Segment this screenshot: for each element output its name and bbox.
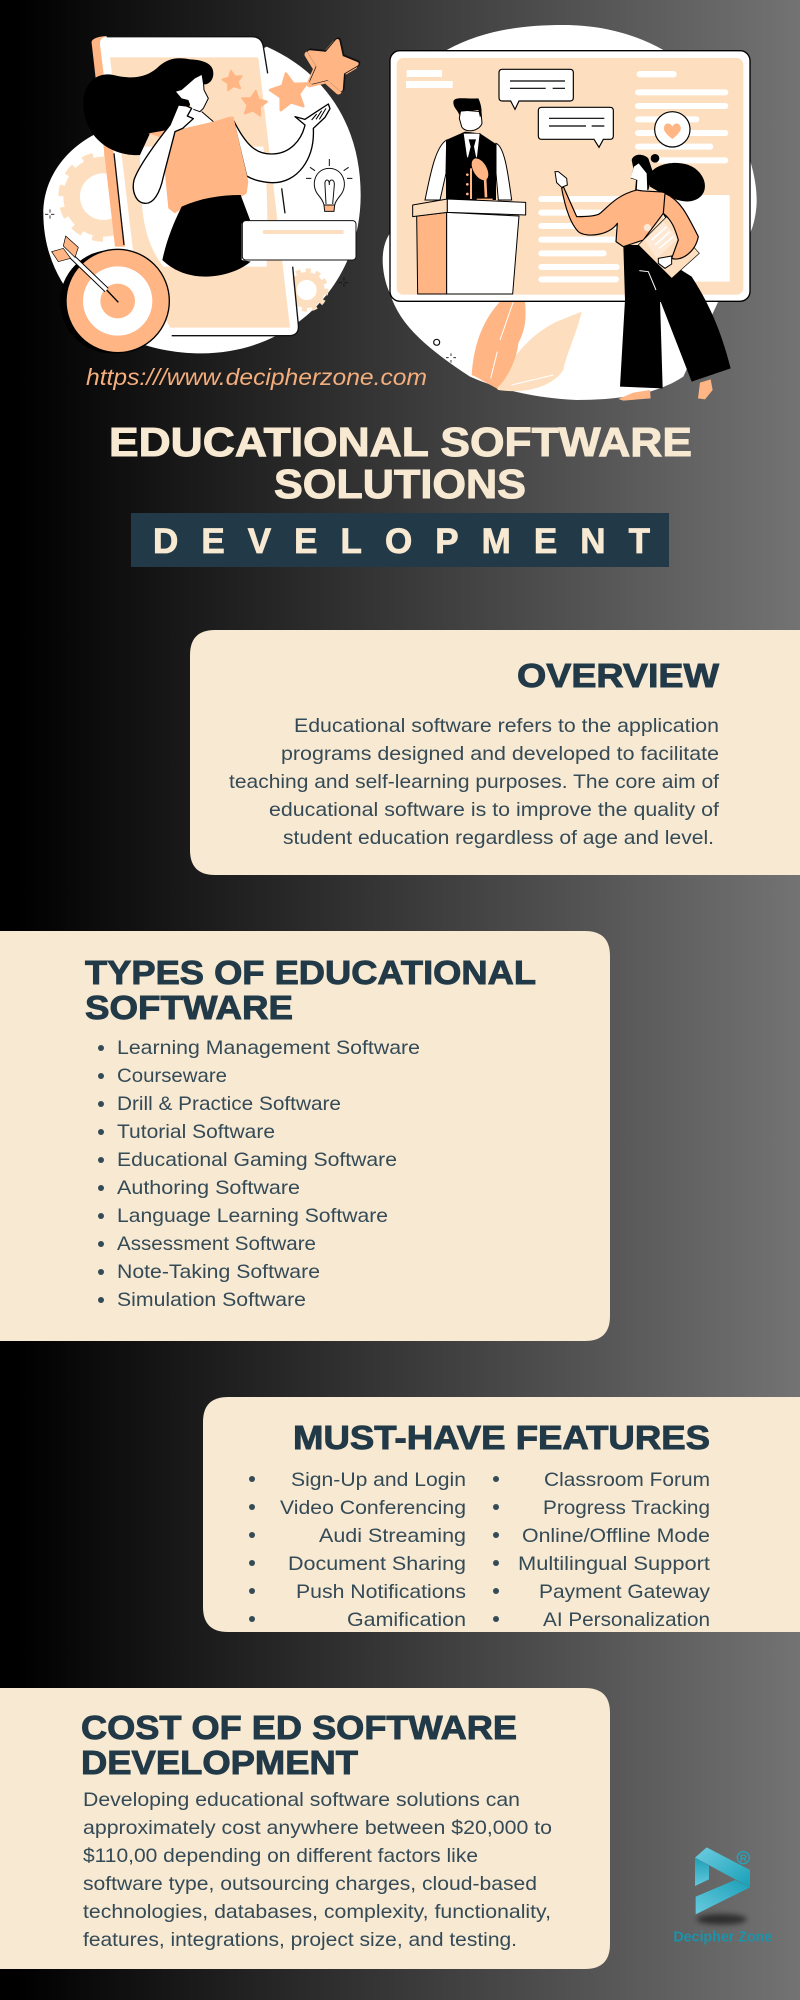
heading: cost bbox=[81, 1709, 517, 1781]
types bullet list: Assessment Software bbox=[117, 1233, 316, 1255]
overview body text: programs designed and developed to facilitate bbox=[281, 743, 719, 765]
cost body text: technologies, databases, complexity, functionality, bbox=[83, 1901, 551, 1923]
website url: https:///www.decipherzone.com bbox=[86, 364, 427, 390]
overview body text: educational software is to improve the quality of bbox=[269, 799, 720, 821]
icon: heart bbox=[655, 112, 690, 147]
features list column one: Sign-Up and Login bbox=[291, 1469, 466, 1491]
overview body text: Educational software refers to the application bbox=[294, 715, 719, 737]
cost body text bbox=[83, 1789, 552, 1951]
cost body text: $110,00 depending on different factors like bbox=[83, 1845, 478, 1867]
cost body text: approximately cost anywhere between $20,000 to bbox=[83, 1817, 552, 1839]
icon: target with arrow bbox=[52, 236, 169, 353]
overview body text: student education regardless of age and level. bbox=[283, 827, 714, 849]
decorative dots bbox=[434, 339, 456, 363]
heading: cost: COST OF ED SOFTWARE bbox=[81, 1709, 517, 1746]
features list column two: Multilingual Support bbox=[518, 1553, 711, 1575]
types bullet list: Learning Management Software bbox=[117, 1037, 420, 1059]
cost body text: software type, outsourcing charges, cloud-based bbox=[83, 1873, 537, 1895]
stars on tablet bbox=[221, 69, 310, 116]
types bullet list: Note-Taking Software bbox=[117, 1261, 320, 1283]
presenter man bbox=[425, 98, 512, 200]
subtitle banner: DEVELOPMENT bbox=[153, 522, 650, 561]
panel: must-have features bbox=[203, 1397, 800, 1632]
logo: Decipher Zone bbox=[673, 1847, 772, 1946]
white background blob bbox=[383, 25, 757, 400]
speech bubble two bbox=[538, 107, 613, 147]
features list column one: Video Conferencing bbox=[280, 1497, 466, 1519]
types bullet list: Tutorial Software bbox=[117, 1121, 275, 1143]
features list column two: Classroom Forum bbox=[544, 1469, 710, 1491]
types bullet list: Language Learning Software bbox=[117, 1205, 388, 1227]
logo: Decipher Zone: R bbox=[740, 1854, 747, 1865]
panel: overview bbox=[190, 630, 800, 875]
leaves bbox=[472, 302, 582, 391]
icon: small gear bbox=[287, 271, 326, 309]
panel: types of educational software bbox=[0, 931, 610, 1341]
illustration: presenter and woman at board bbox=[383, 25, 757, 401]
heading: features: MUST-HAVE FEATURES bbox=[293, 1419, 710, 1456]
title bbox=[109, 419, 692, 507]
speech bubble one bbox=[499, 69, 573, 109]
podium bbox=[413, 199, 526, 294]
sparkles bbox=[45, 209, 349, 288]
cost body text: Developing educational software solutions can bbox=[83, 1789, 520, 1811]
title: SOLUTIONS bbox=[274, 461, 526, 507]
types bullet list: Drill & Practice Software bbox=[117, 1093, 341, 1115]
types bullet list: Courseware bbox=[117, 1065, 227, 1087]
overview body text bbox=[229, 715, 720, 849]
icon: light bulb bbox=[306, 159, 352, 211]
overview body text: teaching and self-learning purposes. The core aim of bbox=[229, 771, 720, 793]
presenting woman bbox=[555, 154, 731, 401]
heading: types bbox=[85, 954, 536, 1026]
heading: cost: DEVELOPMENT bbox=[81, 1744, 358, 1781]
illustration: woman with tablet, stars and target bbox=[43, 35, 362, 353]
cost body text: features, integrations, project size, and testing. bbox=[83, 1929, 517, 1951]
heading: overview: OVERVIEW bbox=[517, 657, 720, 694]
woman figure bbox=[83, 58, 330, 277]
types bullet list: Educational Gaming Software bbox=[117, 1149, 397, 1171]
panel: cost of ed software development bbox=[0, 1688, 610, 1969]
logo: Decipher Zone: Decipher Zone bbox=[673, 1930, 772, 1946]
types bullet list: Authoring Software bbox=[117, 1177, 300, 1199]
heading: types: SOFTWARE bbox=[85, 989, 293, 1026]
heading: types: TYPES OF EDUCATIONAL bbox=[85, 954, 536, 991]
big star bbox=[301, 35, 362, 94]
features list column two: AI Personalization bbox=[543, 1609, 710, 1631]
features list column two: Online/Offline Mode bbox=[522, 1525, 710, 1547]
presentation board bbox=[390, 51, 750, 301]
features list column one: Push Notifications bbox=[296, 1581, 466, 1603]
icon: large gear bbox=[63, 156, 144, 237]
features list column one: Audi Streaming bbox=[319, 1525, 466, 1547]
features list column one bbox=[249, 1469, 466, 1631]
features list column one: Document Sharing bbox=[288, 1553, 466, 1575]
types bullet list bbox=[98, 1037, 420, 1311]
types bullet list: Simulation Software bbox=[117, 1289, 306, 1311]
subtitle banner bbox=[131, 513, 669, 567]
title: EDUCATIONAL SOFTWARE bbox=[109, 419, 692, 465]
tablet device bbox=[92, 36, 298, 336]
features list column two: Payment Gateway bbox=[539, 1581, 710, 1603]
features list column one: Gamification bbox=[347, 1609, 466, 1631]
features list column two bbox=[493, 1469, 711, 1631]
white background blob bbox=[43, 47, 361, 353]
callout card bbox=[242, 221, 356, 260]
features list column two: Progress Tracking bbox=[543, 1497, 710, 1519]
